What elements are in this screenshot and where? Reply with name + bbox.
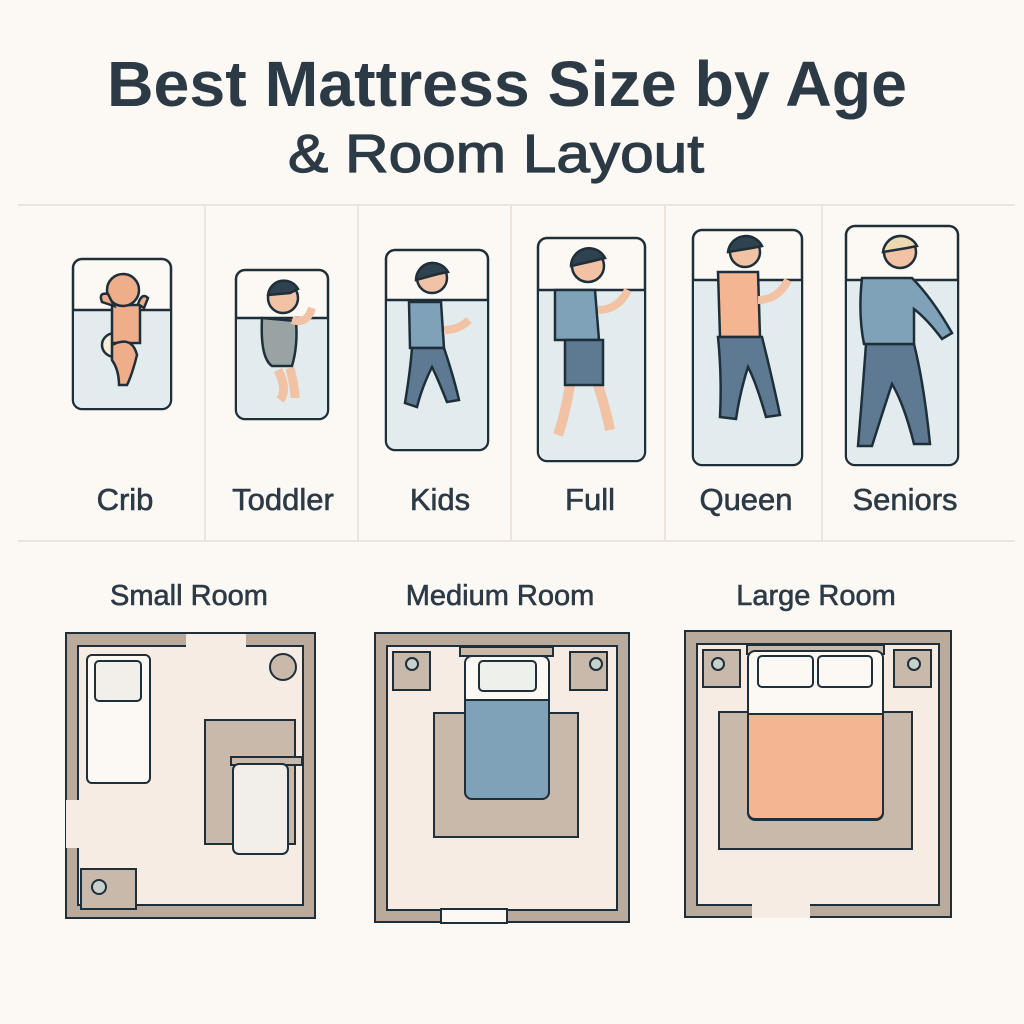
panel: toddler [232,270,334,517]
panel: seniors [846,226,958,517]
room labels: Medium Room [406,580,594,612]
room labels: Small Room [110,580,268,612]
room: small [66,633,315,918]
panel: full: Full [565,482,615,517]
panel: crib: Crib [97,482,153,517]
room labels [110,580,896,612]
panel: queen: Queen [699,482,793,517]
room labels: Large Room [736,580,896,612]
panel: seniors: Seniors [852,482,958,517]
panel: toddler: Toddler [232,482,334,517]
panel: full [538,238,645,517]
title: & Room Layout [288,124,704,184]
room: medium [375,633,629,923]
title: Best Mattress Size by Age [107,48,907,120]
room: large [685,631,951,918]
panel: kids: Kids [410,482,470,517]
panel: queen [693,230,802,517]
panel: crib [73,259,171,517]
panel: kids [386,250,488,517]
title [107,48,907,184]
